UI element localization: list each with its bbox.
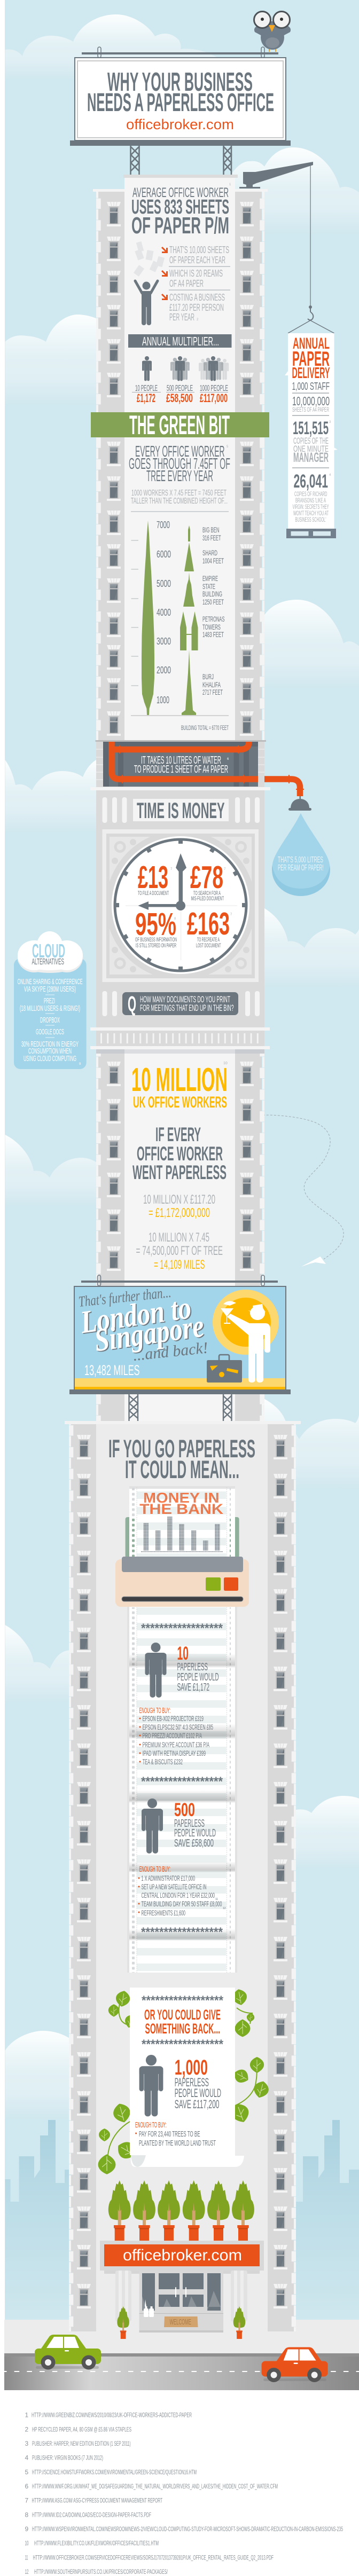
heading: 10 million UK office workers: 10 — [223, 1062, 228, 1065]
text: combined height comparison: TALLER THAN THE COMBINED HEIGHT OF... — [131, 497, 228, 506]
chart: tree height scale: 7000 — [157, 520, 170, 530]
welcome mat — [164, 2316, 198, 2327]
annual multiplier bar: ANNUAL MULTIPLIER... — [142, 334, 219, 348]
panel: cloud alternatives: DROPBOX — [40, 1016, 60, 1025]
question box: Q — [128, 992, 136, 1016]
icon: owl with glasses — [254, 12, 291, 52]
panel: annual paper delivery: 10,000,000 — [292, 394, 330, 408]
windows: tower section three — [107, 1062, 254, 1271]
references: 6 — [25, 2483, 29, 2490]
chart labels: buildings: 2717 FEET — [202, 688, 223, 696]
chart labels: buildings: SHARD — [202, 548, 217, 557]
icon: water drop callout — [272, 813, 330, 896]
chart labels: buildings: EMPIRE — [202, 574, 218, 583]
question box: HOW MANY DOCUMENTS DO YOU PRINT — [140, 994, 230, 1004]
script heading: that's further than london to singapore and back — [77, 1284, 209, 1378]
panel: annual paper delivery: 1,000 STAFF — [292, 381, 330, 392]
people multiplier — [132, 356, 229, 405]
script heading: that's further than london to singapore and back: Singapore — [93, 1309, 207, 1359]
receipt: 10 paperless people: ****************** — [141, 1621, 223, 1636]
crane — [239, 162, 334, 333]
heading: time is money — [133, 798, 229, 823]
list: paper usage facts: 2 — [197, 318, 199, 321]
printer — [115, 1557, 249, 1607]
chart labels: buildings: 316 FEET — [202, 533, 221, 542]
receipt list: 500 people buys: ****************** — [141, 1925, 223, 1939]
chart labels: buildings: BUILDING — [202, 590, 222, 598]
panel: annual paper delivery: 3 — [329, 421, 331, 424]
clock stats: TO RECREATE A — [197, 937, 220, 943]
list: paper usage facts: THAT'S 10,000 SHEETS — [169, 245, 229, 255]
heading: if every office worker went paperless — [132, 1124, 227, 1183]
receipt list: 10 people buys: EPSON ELPSC32 50" 4:3 SCREEN £85 — [143, 1723, 213, 1731]
references: PUBLISHER: VIRGIN BOOKS (7 JUN 2012) — [32, 2454, 103, 2462]
people multiplier: £58,500 — [166, 391, 193, 405]
chart: tree height scale — [131, 520, 229, 716]
paper plane flight path — [252, 1115, 344, 1259]
icon: person with raised arms — [135, 281, 158, 325]
scroll text: give something back: PAY FOR 23,440 TREES TO BE — [139, 2130, 200, 2139]
panel: cloud alternatives: CONSUMPTION WHEN — [28, 1047, 72, 1056]
sign: officebroker.com — [100, 2241, 264, 2274]
heading: average office worker — [131, 183, 231, 239]
cornice and frieze — [90, 1027, 270, 1049]
clock stats: TO FILE A DOCUMENT — [138, 890, 169, 897]
heading: if you go paperless: IT COULD MEAN... — [125, 1455, 239, 1483]
text: water usage: 6 — [227, 758, 229, 761]
scroll text: give something back: 1,000 — [175, 2056, 208, 2079]
receipt list: 500 people buys: ENOUGH TO BUY: — [139, 1865, 170, 1874]
heading: average office worker: 1 — [229, 183, 231, 186]
references: HTTP://WWW.ASG.COM/ ASG-CYPRESS DOCUMENT MANAGEMENT REPORT — [32, 2497, 162, 2504]
receipt list: 500 people buys: 1 X ADMINISTRATOR £17,000 — [141, 1874, 195, 1882]
car shadows — [36, 2366, 326, 2381]
heading: average office worker: USES 833 SHEETS — [131, 196, 229, 218]
chart labels: buildings: TOWERS — [202, 623, 221, 631]
panel: annual paper delivery: 151,515 — [293, 418, 329, 438]
references: 7 — [25, 2497, 29, 2504]
heading: every office worker: TREE EVERY YEAR — [146, 468, 213, 485]
references: 2 — [25, 2425, 29, 2433]
printed paper: money in the bank — [129, 1486, 235, 1561]
chart: tree height scale: 2000 — [157, 665, 171, 676]
receipt list: 10 people buys: ENOUGH TO BUY: — [139, 1707, 170, 1715]
references: 11 — [25, 2554, 28, 2561]
scroll text: give something back: ****************** — [142, 1993, 224, 2008]
leaves and vines — [98, 1988, 270, 2174]
tower section three — [96, 1049, 265, 1421]
clock stats: £78 — [190, 860, 223, 895]
chart labels: buildings: BURJ — [202, 672, 214, 681]
references: HTTP://WWW.SOUTHERNPURSUITS.CO.UK/PRICES/CORPORATE-PACKAGES/ — [34, 2568, 168, 2575]
welcome mat: WELCOME — [170, 2318, 191, 2327]
windows: tower section one — [107, 202, 254, 736]
references: HTTP://SCIENCE.HOWSTUFFWORKS.COM/ENVIRONMENTAL/GREEN-SCIENCE/QUESTION16.HTM — [32, 2468, 197, 2476]
scroll text: give something back: PEOPLE WOULD — [175, 2086, 221, 2100]
receipt list: 10 people buys: TEA & BISCUITS £232 — [143, 1757, 183, 1766]
receipt list: 10 people buys: IPAD WITH RETINA DISPLAY £399 — [143, 1749, 206, 1757]
receipt: 500 paperless people: SAVE £58,600 — [174, 1837, 214, 1849]
panel: cloud alternatives: CLOUD — [32, 940, 65, 962]
chart: tree height scale: 5000 — [157, 578, 171, 589]
city skyline — [5, 2120, 359, 2320]
references — [25, 2412, 343, 2575]
heading: 10 million UK office workers: UK OFFICE WORKERS — [133, 1094, 227, 1111]
people multiplier: £1,172 — [137, 391, 155, 405]
list: paper usage facts: PER YEAR — [169, 312, 194, 323]
receipt list: 10 people buys: PRO PREZZI ACCOUNT £102 P/A — [143, 1731, 202, 1740]
calculation text: 10 MILLION X 7.45 — [149, 1230, 209, 1245]
heading: time is money: TIME IS MONEY — [137, 798, 224, 823]
receipt: 10 paperless people: PAPERLESS — [177, 1661, 208, 1673]
references: 12 — [25, 2568, 29, 2575]
receipt: 500 paperless people: PAPERLESS — [174, 1818, 205, 1829]
panel: annual paper delivery: 26,041 — [294, 471, 328, 492]
road — [4, 2353, 359, 2390]
receipt list: 500 people buys: TEAM BUILDING DAY FOR 50 STAFF £8,000 — [141, 1899, 222, 1908]
list: paper usage facts: COSTING A BUSINESS — [169, 292, 225, 303]
scroll text: give something back: ENOUGH TO BUY: — [135, 2121, 167, 2130]
text: water usage — [134, 755, 229, 775]
list: paper usage facts — [162, 245, 230, 323]
text: PEOPLE WOULD — [174, 1827, 216, 1839]
chart: tree height scale: 1000 — [157, 695, 169, 705]
panel: cloud alternatives: ALTERNATIVES — [32, 957, 64, 967]
references: 10 — [25, 2540, 29, 2547]
receipt list: 500 people buys: SET UP A NEW SATELLITE OFFICE IN — [141, 1882, 206, 1891]
chart labels: buildings: BUILDING TOTAL = 6770 FEET — [181, 724, 229, 732]
clock stats: 8 — [174, 917, 176, 921]
scroll text: give something back: PAPERLESS — [175, 2076, 209, 2089]
title — [87, 68, 274, 117]
people multiplier: 10 PEOPLE — [135, 384, 158, 393]
panel: annual paper delivery: 4 — [329, 474, 331, 477]
clock face surround — [103, 829, 259, 982]
heading: if every office worker went paperless: WENT PAPERLESS — [132, 1161, 227, 1183]
references: 4 — [25, 2454, 29, 2462]
text: water usage: TO PRODUCE 1 SHEET OF A4 PAPER — [134, 764, 228, 775]
printed paper: money in the bank: MONEY IN — [143, 1490, 219, 1506]
panel: cloud alternatives: PREZI — [44, 996, 55, 1006]
panel: cloud alternatives: ONLINE SHARING & CONFERENCE — [18, 977, 83, 986]
receipt list: 10 people buys — [139, 1707, 223, 1789]
receipt list: 10 people buys: EPSON EB-X02 PROJECTOR £319 — [143, 1714, 204, 1723]
calculation text — [136, 1192, 223, 1272]
receipt list: 500 people buys: REFRESHMENTS £1,600 — [141, 1909, 185, 1917]
panel: annual paper delivery: COPIES OF RICHARD — [294, 490, 327, 498]
icon: falling paper — [134, 241, 165, 277]
scroll text: give something back: ****************** — [142, 2037, 224, 2052]
clock stats: £163 — [187, 906, 230, 941]
people multiplier: £117,000 — [200, 391, 228, 405]
question box: FOR MEETINGS THAT END UP IN THE BIN? — [140, 1003, 234, 1013]
sign: officebroker.com: officebroker.com — [123, 2247, 242, 2264]
billboard: title — [70, 47, 291, 175]
heading: every office worker: EVERY OFFICE WORKER — [135, 443, 224, 460]
chart labels: buildings: 1250 FEET — [202, 598, 224, 606]
panel: cloud alternatives: 9 — [79, 1063, 81, 1066]
chart: tree height scale: 4000 — [157, 607, 171, 618]
clock stats: TO SEARCH FOR A — [193, 890, 221, 897]
potted trees row — [108, 2180, 254, 2241]
list: paper usage facts: OF PAPER EACH YEAR — [169, 255, 225, 265]
panel: annual paper delivery: SHEETS OF A4 PAPER — [292, 406, 329, 413]
receipt list: 10 people buys: ****************** — [141, 1774, 223, 1789]
clock stats: LOST DOCUMENT — [196, 943, 221, 949]
calculation text: 10 MILLION X £117.20 — [143, 1192, 215, 1207]
chart labels: buildings: 1004 FEET — [202, 556, 224, 565]
references: 5 — [25, 2468, 29, 2476]
list: paper usage facts: WHICH IS 20 REAMS — [169, 268, 223, 279]
question box — [122, 992, 238, 1016]
references: HP RECYCLED PAPER, A4, 80 GSM @ £5.86 VIA STAPLES — [32, 2425, 131, 2433]
script heading: that's further than london to singapore and back: London to — [79, 1291, 194, 1341]
panel: annual paper delivery: BRANSONS 'LIKE A — [295, 497, 326, 504]
scroll text: give something back: PLANTED BY THE WORLD LAND TRUST — [139, 2139, 216, 2148]
scroll text: give something back: OR YOU COULD GIVE — [144, 2007, 221, 2023]
lower building — [65, 1421, 301, 2353]
clock — [112, 836, 249, 974]
receipt: 500 paperless people — [142, 1799, 216, 1854]
panel: cloud alternatives: 30% REDUCTION IN ENERGY — [21, 1040, 79, 1049]
script heading: that's further than london to singapore and back: 13,482 MILES — [84, 1362, 140, 1378]
clock stats: 7 — [230, 913, 232, 916]
heading: every office worker — [129, 443, 230, 485]
references: 3 — [25, 2440, 29, 2447]
banner: the green bit — [91, 410, 269, 440]
people multiplier: 500 PEOPLE — [167, 384, 193, 393]
references: 8 — [25, 2511, 29, 2518]
heading: average office worker: OF PAPER P/M — [131, 213, 229, 239]
icon: paper plane — [301, 1256, 326, 1267]
receipt: 500 paperless people: 500 — [174, 1800, 195, 1820]
chart labels: buildings: KHALIFA — [202, 680, 221, 689]
sill — [90, 787, 270, 790]
heading: 10 million UK office workers: 10 MILLION — [131, 1062, 228, 1098]
chart labels: buildings: BIG BEN — [202, 525, 219, 534]
scroll text: give something back: SOMETHING BACK... — [145, 2021, 220, 2037]
text: water usage: IT TAKES 10 LITRES OF WATER — [141, 755, 221, 766]
panel: cloud alternatives: VIA SKYPE (280M USERS) — [24, 985, 76, 994]
entrance: pilasters and doors — [115, 2271, 247, 2332]
clock stats: 95% — [135, 907, 176, 942]
illustration: traveller with cocktail — [221, 1301, 270, 1383]
panel: cloud alternatives: (18 MILLION USERS & RISING!) — [20, 1004, 80, 1013]
chart: building silhouettes — [180, 525, 198, 715]
orange car — [262, 2347, 328, 2382]
printer paper output tray — [126, 1517, 239, 1560]
scroll: give something back — [130, 1988, 244, 2167]
panel: annual paper delivery — [285, 333, 338, 538]
receipt paper — [127, 1605, 237, 1973]
printed paper: money in the bank: THE BANK — [139, 1501, 224, 1517]
panel: annual paper delivery: ANNUAL — [293, 335, 330, 352]
billboard: london to singapore — [69, 1275, 291, 1421]
clock stats: MIS-FILED DOCUMENT — [191, 896, 224, 902]
chart labels: buildings — [181, 525, 229, 732]
script heading: that's further than london to singapore and back: London to — [78, 1290, 193, 1340]
heading: if every office worker went paperless: IF EVERY — [155, 1124, 201, 1145]
annual multiplier bar — [128, 334, 232, 348]
clock stats: IS STILL STORED ON PAPER — [136, 943, 176, 949]
calculation text: = 14,109 MILES — [154, 1258, 205, 1272]
text: combined height comparison — [131, 489, 229, 512]
green car — [35, 2335, 101, 2370]
clock stats: 7 — [224, 868, 226, 871]
people multiplier: 1000 PEOPLE — [200, 384, 228, 393]
references: HTTP://WWW.GREENBIZ.COM/NEWS/2010/08/23/UK-OFFICE-WORKERS-ADDICTED-PAPER — [32, 2412, 192, 2419]
references: PUBLISHER: HARPER; NEW EDITION EDITION (1 SEP 2011) — [32, 2440, 131, 2447]
heading: average office worker: AVERAGE OFFICE WORKER — [132, 185, 229, 200]
banner: the green bit: THE GREEN BIT — [129, 410, 230, 440]
text: GOES THROUGH 7.45FT OF — [129, 455, 230, 473]
scroll text: give something back — [135, 1993, 224, 2148]
list: paper usage facts: OF A4 PAPER — [169, 278, 204, 289]
chart labels: buildings: STATE — [202, 582, 215, 591]
receipt list: 500 people buys — [138, 1865, 226, 1939]
clock stats — [135, 860, 232, 949]
receipt: 10 paperless people: SAVE £1,172 — [177, 1682, 209, 1693]
windows: lower building — [77, 1435, 287, 2308]
panel: annual paper delivery: ONE MINUTE — [293, 444, 329, 454]
references: HTTP://WWW.ID2.CA/DOWNLOADS/ECO-DESIGN-PAPER-FACTS.PDF — [32, 2511, 151, 2518]
tower section one — [93, 175, 268, 742]
logo: officebroker.com: officebroker.com — [126, 116, 234, 132]
calculation text: = £1,172,000,000 — [149, 1206, 210, 1220]
small potted trees — [117, 2306, 245, 2339]
icon: suitcase — [207, 1355, 242, 1383]
heading: if every office worker went paperless: OFFICE WORKER — [137, 1143, 223, 1165]
script heading: that's further than london to singapore and back: That's further than... — [77, 1284, 172, 1310]
script heading: that's further than london to singapore and back: ...and back! — [132, 1339, 209, 1364]
scroll text: give something back: SAVE £117,200 — [175, 2098, 220, 2111]
chart labels: buildings: 1483 FEET — [202, 630, 224, 639]
chart: tree height scale: 6000 — [157, 549, 171, 560]
receipt: 10 paperless people — [141, 1621, 223, 1698]
heading: 10 million UK office workers — [131, 1062, 228, 1111]
references: HTTP://WWW.FLEXIBILITY.CO.UK/FLEXWORK/OFFICES/FACILITIES1.HTM — [34, 2540, 159, 2547]
panel: cloud alternatives: USING CLOUD COMPUTING — [24, 1054, 76, 1063]
list: paper usage facts: £117.20 PER PERSON — [169, 302, 224, 313]
references: 9 — [25, 2525, 29, 2533]
receipt list: 10 people buys: PREMIUM SKYPE ACCOUNT £36 P/A — [143, 1740, 209, 1749]
receipt list: 500 people buys: 12 — [223, 1907, 226, 1910]
receipt list: 500 people buys: CENTRAL LONDON FOR 1 YEAR £32,000 — [141, 1891, 215, 1899]
panel: cloud alternatives: GOOGLE DOCS — [36, 1027, 64, 1036]
clock tower body — [96, 790, 264, 1027]
ground — [4, 2320, 359, 2354]
references: 1 — [25, 2412, 29, 2419]
clock stats: OF BUSINESS INFORMATION — [135, 937, 177, 943]
chart labels: buildings: PETRONAS — [202, 615, 224, 623]
heading: every office worker: 5 — [227, 445, 229, 449]
receipt list: 500 people buys: 11 — [215, 1898, 218, 1901]
icon: tap head — [288, 796, 311, 811]
clock stats: 7 — [170, 868, 173, 871]
text: combined height comparison: 1000 WORKERS X 7.45 FEET = 7450 FEET — [131, 489, 227, 498]
bar chart: dot matrix bars — [141, 1517, 223, 1552]
panel: annual paper delivery: BUSINESS SCHOOL' — [295, 516, 326, 523]
water section with pipes — [95, 740, 304, 796]
script heading: that's further than london to singapore and back: Singapore — [92, 1308, 206, 1358]
receipt: 10 paperless people: PEOPLE WOULD — [177, 1671, 219, 1683]
clock stats: £13 — [138, 860, 168, 895]
calculation text: = 74,500,000 FT OF TREE — [136, 1244, 223, 1258]
chart: tree height scale: 3000 — [157, 636, 171, 647]
panel: cloud alternatives — [14, 931, 87, 1069]
heading: if you go paperless — [108, 1434, 255, 1483]
receipt: 10 paperless people: 10 — [177, 1643, 189, 1664]
